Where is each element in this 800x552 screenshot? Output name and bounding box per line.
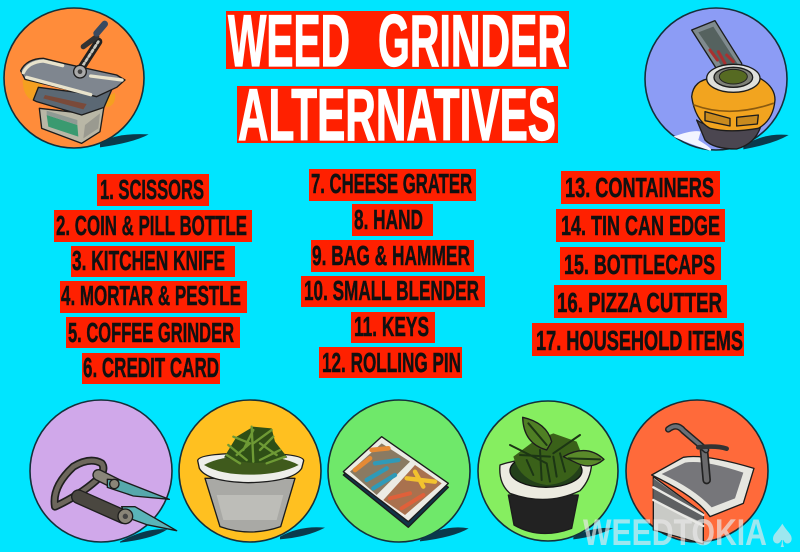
icon: cheese grater on orange circle [4,8,149,148]
list column: items 13 to 17 [532,171,744,356]
list column: items 7 to 12: 10. SMALL BLENDER [304,275,479,306]
icon: metal grater box on red-orange circle [626,400,768,544]
list column: items 13 to 17: 15. BOTTLECAPS [564,249,715,280]
icon: orange grinder with card on blue circle [645,8,789,151]
title [226,1,569,156]
list column: items 7 to 12: 9. BAG & HAMMER [312,240,470,271]
list column: items 7 to 12: 12. ROLLING PIN [322,347,461,378]
list column: items 13 to 17: 13. CONTAINERS [565,172,714,203]
title: WEED [228,1,350,82]
list column: items 1 to 6: 2. COIN & PILL BOTTLE [56,210,247,241]
list column: items 1 to 6 [54,174,252,384]
list column: items 1 to 6: 5. COFFEE GRINDER [68,317,234,348]
icon: plant in black pot on green circle [478,401,618,541]
list column: items 1 to 6: 3. KITCHEN KNIFE [72,245,225,276]
title: ALTERNATIVES [238,75,556,156]
icon: plant in silver pot on yellow circle [179,400,325,542]
list column: items 7 to 12 [301,168,485,378]
icon: metal tin with colourful contents on green circle [328,400,470,542]
list column: items 13 to 17: 16. PIZZA CUTTER [557,287,722,318]
icon: pruning shears on lilac circle [30,400,177,543]
list column: items 7 to 12: 11. KEYS [354,311,429,342]
list column: items 7 to 12: 8. HAND [354,204,423,235]
list column: items 7 to 12: 7. CHEESE GRATER [311,168,472,199]
list column: items 1 to 6: 1. SCISSORS [100,174,204,205]
list column: items 1 to 6: 4. MORTAR & PESTLE [61,280,241,311]
title: GRINDER [378,1,567,82]
list column: items 1 to 6: 6. CREDIT CARD [83,352,219,383]
